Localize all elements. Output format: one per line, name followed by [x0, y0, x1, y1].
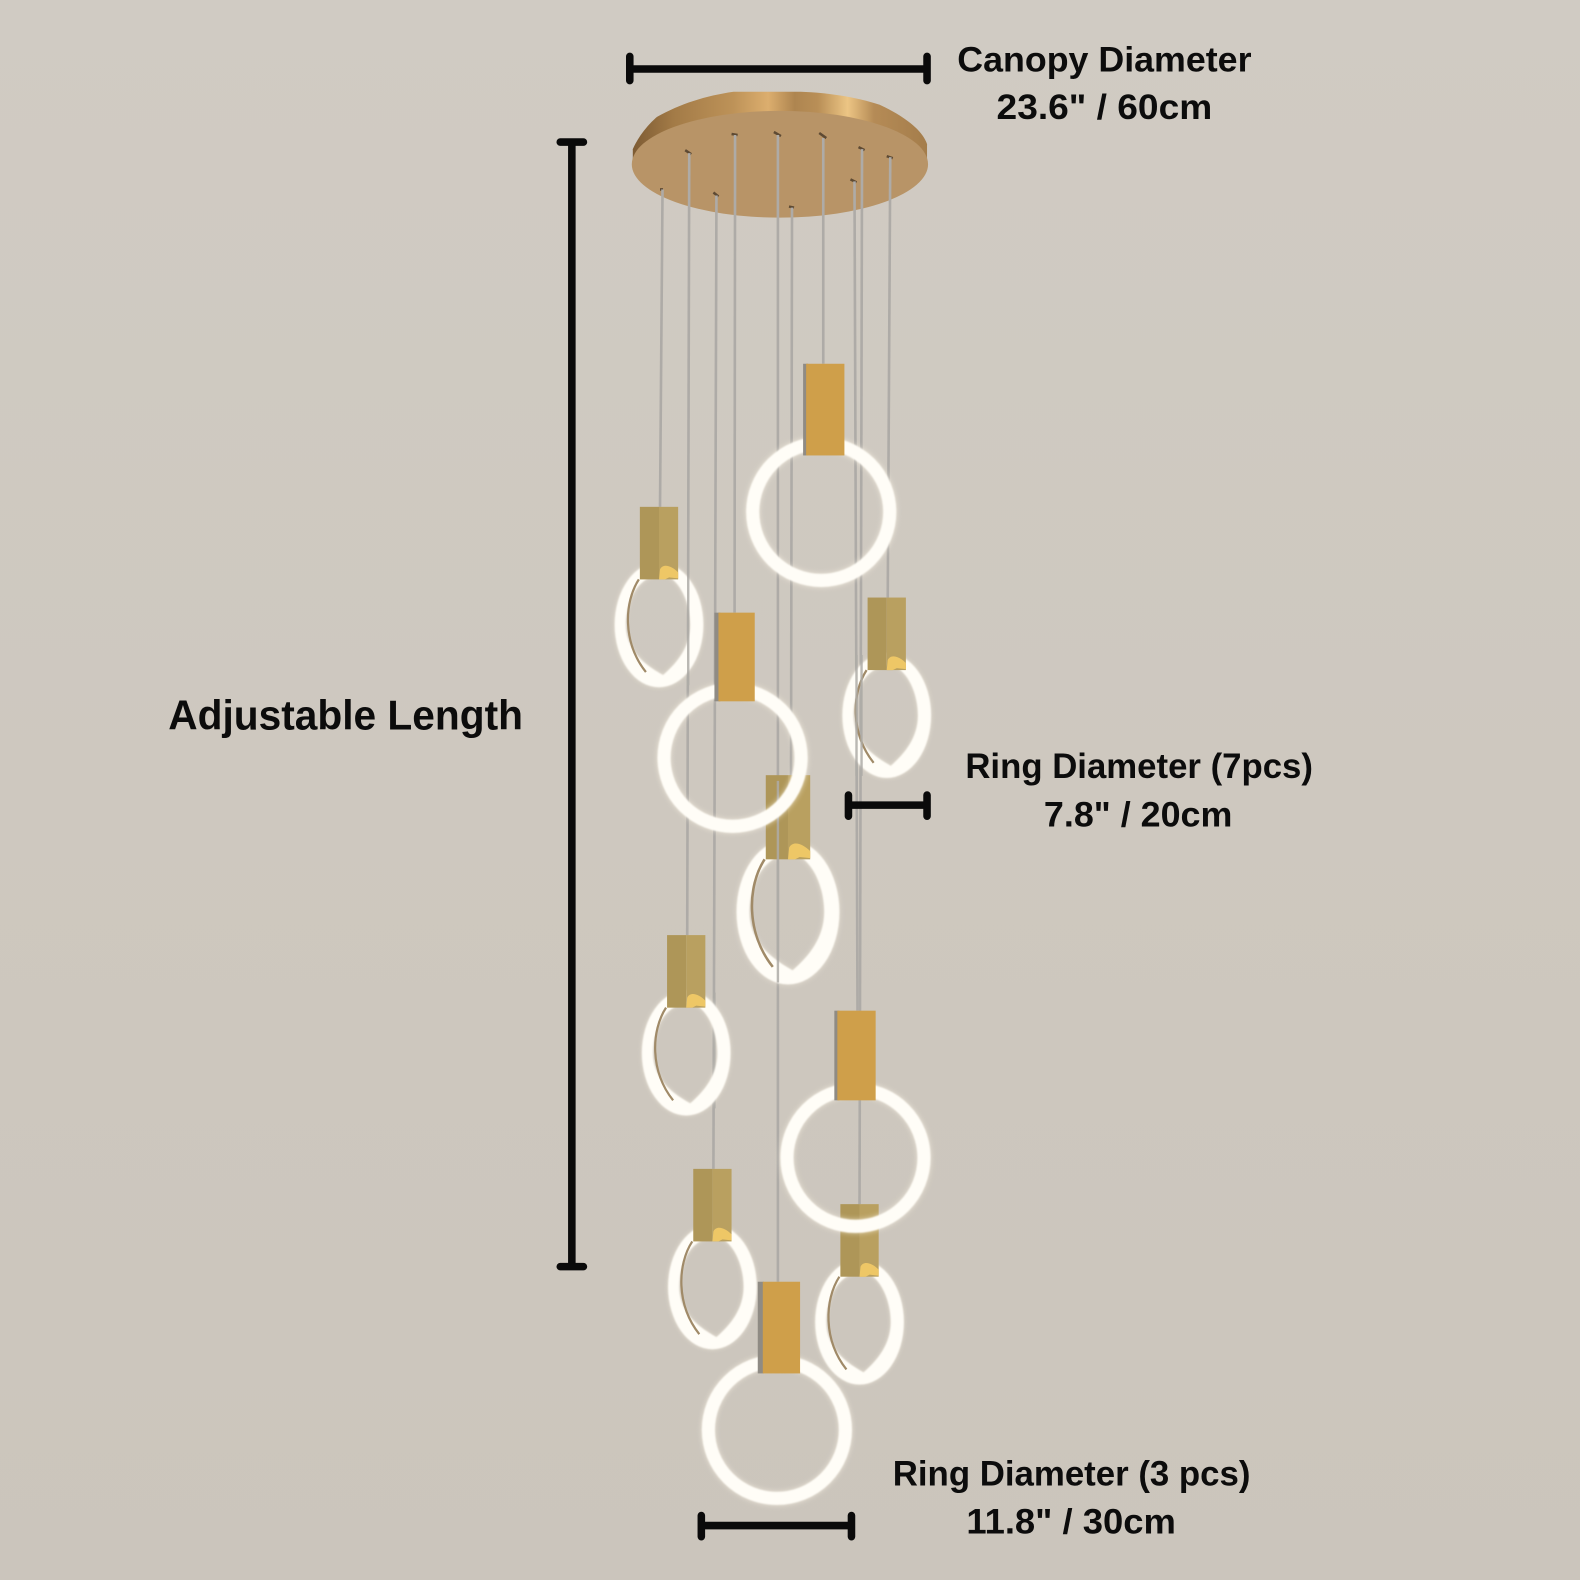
pendant: large ring left — [664, 613, 801, 826]
hanging wires — [660, 135, 890, 1282]
label: canopy diameter — [957, 41, 1252, 127]
canopy rim — [633, 92, 927, 166]
label: 3pcs ring diameter: 11.8" / 30cm — [966, 1503, 1176, 1542]
pendant: large ring bottom — [708, 1282, 845, 1498]
pendant: small ring far upper left — [615, 507, 703, 687]
canopy — [632, 92, 928, 218]
pendant: small ring lower right — [815, 1204, 904, 1385]
label: 7pcs ring diameter: Ring Diameter (7pcs) — [965, 747, 1313, 786]
label: 7pcs ring diameter: 7.8" / 20cm — [1044, 795, 1232, 834]
label: 3pcs ring diameter: Ring Diameter (3 pcs) — [893, 1454, 1250, 1493]
pendant: small ring right — [842, 598, 931, 778]
dimension bar: canopy diameter — [630, 56, 927, 81]
dimension bar: 3pcs ring diameter — [701, 1516, 851, 1537]
label: 7pcs ring diameter — [965, 747, 1313, 834]
dimension bar: 7pcs ring diameter — [848, 795, 927, 816]
label: canopy diameter: Canopy Diameter — [957, 41, 1252, 80]
pendant: small ring bottom left — [668, 1169, 757, 1349]
label: adjustable length: Adjustable Length — [168, 693, 523, 739]
label: canopy diameter: 23.6" / 60cm — [997, 88, 1212, 127]
canopy face — [632, 111, 928, 218]
dimension bar: adjustable length — [560, 142, 583, 1267]
pendant: large ring top — [753, 364, 890, 580]
wires passing in front of small rings — [688, 564, 862, 1108]
pendant: large ring right — [787, 1011, 924, 1226]
canopy wire holes — [660, 132, 893, 208]
label: 3pcs ring diameter — [893, 1454, 1250, 1542]
pendant: medium ring centre — [737, 775, 839, 984]
pendant: small ring lower left — [642, 935, 731, 1115]
